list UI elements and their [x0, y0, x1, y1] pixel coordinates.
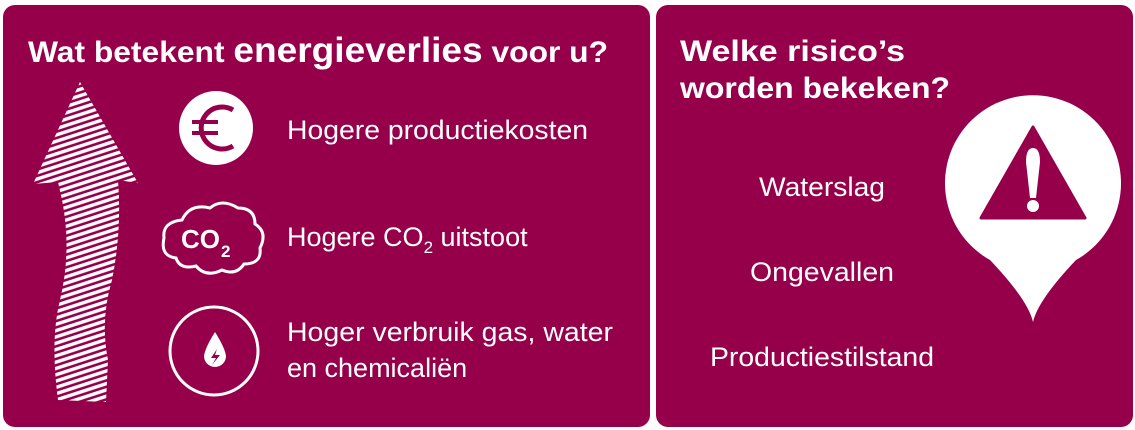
text: CO2: uitstoot [433, 222, 528, 252]
panel: left [3, 5, 650, 427]
panel: right [656, 5, 1133, 427]
title: right: Welke risico’s [680, 35, 905, 68]
icon: warning pin [945, 95, 1121, 322]
icon: CO2 cloud: CO [181, 224, 220, 254]
text: verbruik: Hoger verbruik gas, water [287, 317, 613, 347]
icon: euro [179, 91, 253, 165]
icon: CO2 cloud: 2 [221, 242, 230, 261]
icon: drop [170, 307, 258, 395]
title: left: Wat betekent energieverlies voor u? [28, 31, 608, 70]
icon: CO2 cloud [163, 203, 263, 273]
text: verbruik [287, 317, 613, 383]
text: productiekosten: Hogere productiekosten [287, 115, 588, 145]
text: CO2: Hogere CO [287, 222, 424, 252]
list: risks [710, 172, 934, 372]
text: verbruik: en chemicaliën [287, 353, 467, 383]
title: right: worden bekeken? [679, 72, 950, 105]
list: risks: Ongevallen [750, 257, 894, 287]
list: risks: Productiestilstand [710, 342, 934, 372]
list: risks: Waterslag [759, 172, 885, 202]
text: CO2: 2 [424, 238, 433, 257]
icon: scribbled arrow [34, 82, 138, 402]
title: right [679, 35, 950, 105]
